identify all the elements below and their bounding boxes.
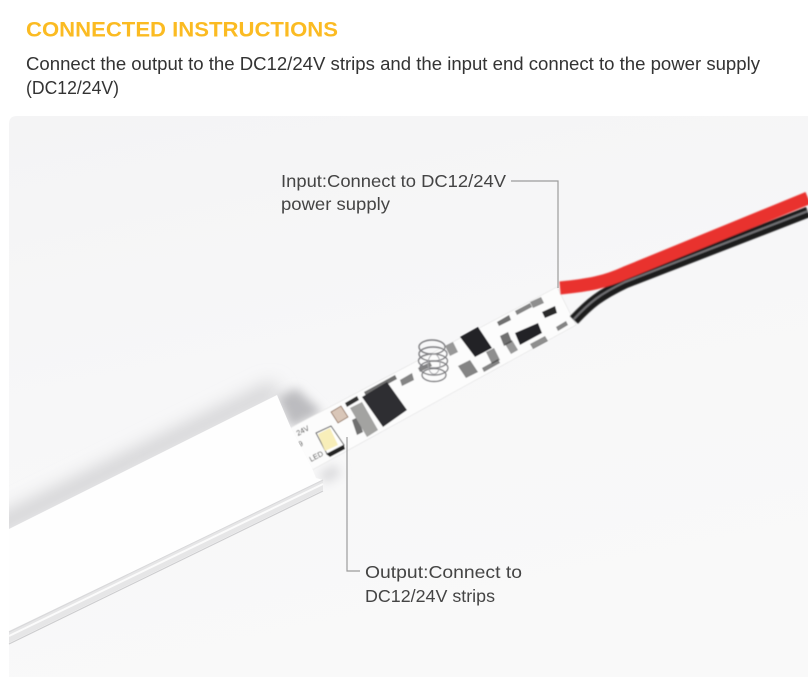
input label bbox=[281, 171, 506, 214]
PCB printing: LED bbox=[308, 449, 325, 464]
output label: DC12/24V strips bbox=[365, 586, 495, 606]
PCB printing: 9 bbox=[297, 439, 305, 449]
chip: 8-pin IC right bbox=[515, 323, 542, 345]
input leader line bbox=[511, 181, 558, 288]
board end shadow bbox=[318, 464, 342, 484]
input label: power supply bbox=[281, 194, 390, 214]
PCB printing: 24V bbox=[295, 424, 311, 438]
callout: output bbox=[347, 437, 522, 606]
instruction text: (DC12/24V) bbox=[26, 78, 119, 98]
PCB bbox=[290, 287, 576, 470]
profile cover face bbox=[9, 395, 323, 632]
chip: small transistor bbox=[542, 306, 557, 318]
instruction text: Connect the output to the DC12/24V strips and the input end connect to the power supply bbox=[26, 54, 760, 74]
output label: Output:Connect to bbox=[365, 562, 522, 582]
output label bbox=[365, 562, 522, 606]
input label: Input:Connect to DC12/24V bbox=[281, 171, 506, 191]
aluminium profile bbox=[9, 395, 323, 644]
notch shadow bbox=[277, 388, 322, 428]
large MOSFET chip bbox=[350, 382, 407, 437]
output leader line bbox=[347, 437, 360, 571]
PCB traces and components bbox=[345, 297, 568, 435]
PCB printing bbox=[295, 424, 325, 464]
touch spring bbox=[418, 340, 448, 382]
profile rail highlights bbox=[9, 484, 323, 636]
chip: 8-pin IC left bbox=[460, 327, 492, 357]
wires bbox=[560, 198, 808, 320]
aluminium profile shadow bbox=[9, 379, 281, 529]
red wire bbox=[560, 198, 808, 288]
instruction text bbox=[26, 54, 760, 98]
profile cover edge bbox=[9, 480, 323, 643]
black wire bbox=[574, 212, 808, 320]
callout: input bbox=[281, 171, 558, 288]
LED component bbox=[316, 426, 345, 457]
LED strip board bbox=[290, 287, 576, 470]
title: CONNECTED INSTRUCTIONS bbox=[26, 18, 338, 42]
capacitor pad bbox=[331, 406, 348, 423]
